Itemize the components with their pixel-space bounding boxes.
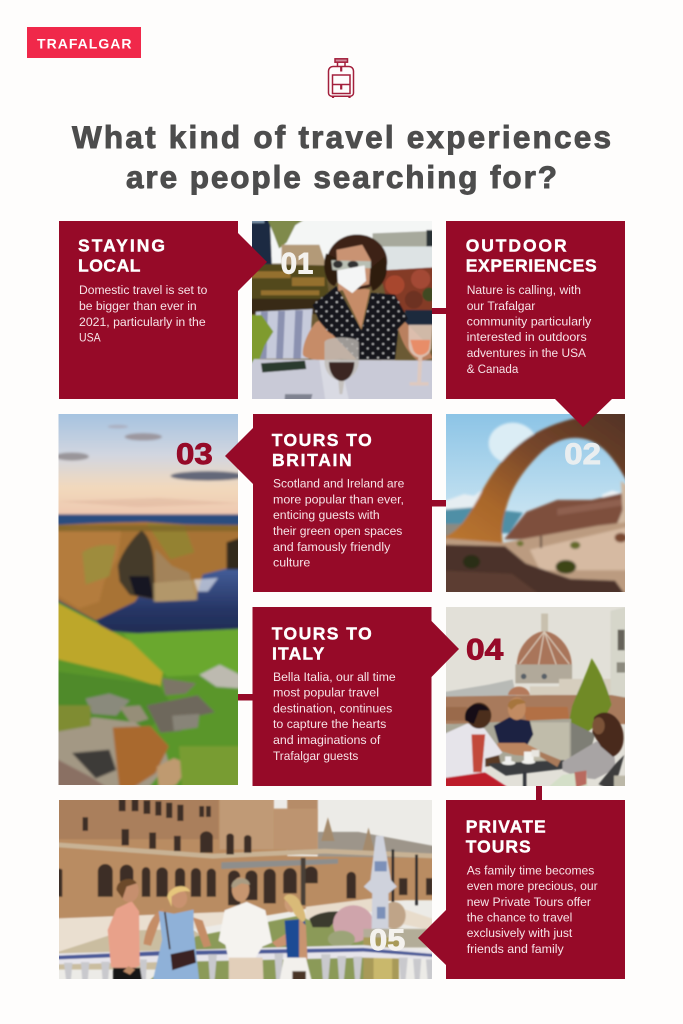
body text: outdoor experiences: interested in outdoors: [467, 330, 587, 344]
body text: private tours: the chance to travel: [467, 910, 572, 924]
body text: tours to Britain: and famously friendly: [273, 540, 391, 554]
body text: staying local: USA: [79, 330, 101, 344]
body text: tours to Britain: enticing guests with: [273, 508, 380, 522]
heading: outdoor experiences: OUTDOOR: [466, 236, 567, 256]
body text: private tours: [467, 863, 598, 956]
number 03: 03: [176, 438, 213, 471]
body text: tours to Britain: Scotland and Ireland are: [273, 477, 404, 491]
photo: Irish sea cliffs: [58, 414, 238, 785]
body text: private tours: exclusively with just: [467, 926, 573, 940]
photo: woman in mask at terrace table: [252, 221, 432, 399]
panel: outdoor experiences: [446, 221, 625, 427]
body text: staying local: 2021, particularly in the: [79, 315, 206, 329]
heading: tours to Italy: ITALY: [272, 643, 325, 663]
body text: staying local: Domestic travel is set to: [79, 283, 207, 297]
heading: staying local: LOCAL: [78, 256, 141, 276]
body text: tours to Britain: [273, 477, 404, 570]
photo: desert rock arch: [446, 414, 625, 592]
heading: private tours: [466, 817, 546, 856]
number 05: 05: [369, 924, 405, 957]
heading: outdoor experiences: EXPERIENCES: [466, 256, 597, 276]
body text: outdoor experiences: & Canada: [467, 362, 518, 376]
body text: private tours: As family time becomes: [467, 863, 594, 877]
body text: tours to Italy: [273, 670, 396, 763]
panel: tours to Britain: [225, 414, 432, 592]
heading: tours to Britain: TOURS TO: [272, 430, 372, 450]
icon: suitcase: [328, 59, 354, 98]
number 02: 02: [564, 438, 601, 471]
panel: private tours: [418, 800, 625, 979]
title: are people searching for?: [126, 159, 557, 195]
body text: private tours: friends and family: [467, 942, 564, 956]
logo: Trafalgar: [27, 27, 141, 58]
body text: tours to Italy: to capture the hearts: [273, 717, 386, 731]
body text: outdoor experiences: adventures in the USA: [467, 346, 587, 360]
number 04: 04: [466, 633, 504, 666]
panel: staying local: [59, 221, 267, 399]
body text: outdoor experiences: Nature is calling, with: [467, 283, 581, 297]
body text: tours to Britain: culture: [273, 556, 310, 570]
title: [72, 119, 611, 195]
heading: tours to Britain: [272, 430, 372, 470]
heading: private tours: TOURS: [466, 836, 531, 856]
heading: tours to Britain: BRITAIN: [272, 450, 352, 470]
heading: private tours: PRIVATE: [466, 817, 546, 837]
body text: outdoor experiences: our Trafalgar: [467, 299, 535, 313]
body text: tours to Italy: Trafalgar guests: [273, 749, 358, 763]
number 01: 01: [281, 247, 313, 280]
title: What kind of travel experiences: [72, 119, 611, 155]
body text: private tours: new Private Tours offer: [467, 895, 591, 909]
heading: tours to Italy: TOURS TO: [272, 623, 372, 643]
photo: friends at Plaza de Espana: [59, 800, 432, 979]
body text: tours to Italy: Bella Italia, our all time: [273, 670, 396, 684]
connector lines: [238, 308, 542, 800]
body text: tours to Italy: most popular travel: [273, 686, 379, 700]
body text: outdoor experiences: community particularly: [467, 314, 592, 328]
body text: outdoor experiences: [467, 283, 592, 376]
heading: staying local: STAYING: [78, 236, 165, 256]
heading: staying local: [78, 236, 165, 276]
heading: tours to Italy: [272, 623, 372, 663]
body text: staying local: [79, 283, 207, 344]
body text: tours to Britain: their green open spaces: [273, 524, 402, 538]
body text: private tours: even more precious, our: [467, 879, 598, 893]
body text: tours to Italy: destination, continues: [273, 702, 392, 716]
photo: group at rooftop cafe with Florence dome: [446, 607, 625, 786]
panel: tours to Italy: [252, 607, 459, 786]
body text: tours to Italy: and imaginations of: [273, 733, 381, 747]
heading: outdoor experiences: [466, 236, 597, 276]
body text: staying local: be bigger than ever in: [79, 299, 197, 313]
logo: Trafalgar: TRAFALGAR: [37, 35, 132, 51]
body text: tours to Britain: more popular than ever,: [273, 492, 404, 506]
